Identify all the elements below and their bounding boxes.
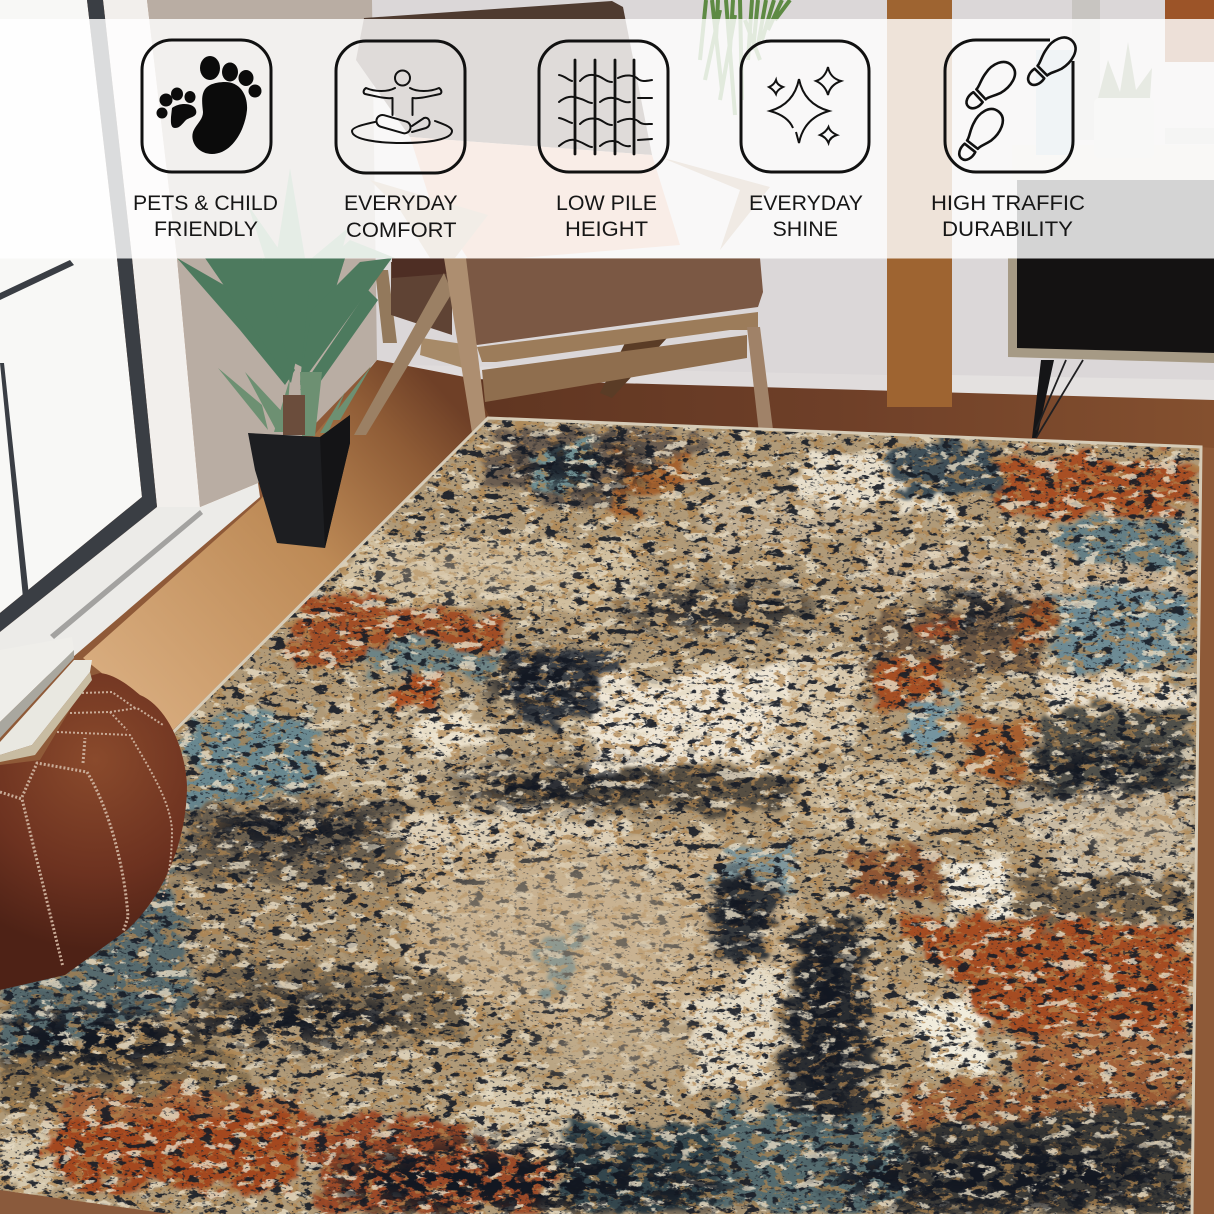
hanging plant (700, 0, 790, 115)
icon: low pile height (539, 41, 668, 172)
label: everyday shine: EVERYDAY (749, 192, 863, 215)
plant (177, 168, 395, 548)
label: everyday comfort: EVERYDAY (344, 192, 458, 215)
seat cushion side and front (391, 258, 452, 335)
leather pouf (0, 673, 187, 990)
label: high traffic durability: DURABILITY (942, 218, 1073, 241)
plant pot (248, 415, 350, 548)
label: pets and child friendly: FRIENDLY (154, 218, 258, 241)
back wall (370, 0, 1214, 395)
light wood floor (83, 360, 490, 730)
front legs (444, 258, 501, 545)
icon: high traffic durability (945, 32, 1081, 172)
icon: everyday comfort (336, 41, 465, 173)
label: everyday shine: SHINE (772, 218, 838, 241)
label: low pile height: LOW PILE (556, 192, 657, 215)
rug speckle layers (0, 410, 1214, 1214)
label: pets and child friendly: PETS & CHILD (133, 192, 278, 215)
chair (354, 1, 781, 545)
chair back cushion (356, 1, 652, 155)
pillow (410, 137, 680, 262)
dark wood floor (440, 378, 1214, 1214)
rug edge (0, 418, 1201, 1214)
label: pets and child friendly (133, 192, 278, 241)
chair arms (660, 157, 770, 250)
label: low pile height (556, 192, 657, 241)
plant leaves behind band (248, 168, 395, 258)
wooden post (887, 0, 952, 407)
back legs (375, 270, 397, 343)
label: everyday shine (749, 192, 863, 241)
window (0, 0, 260, 710)
window sill (0, 483, 260, 710)
media console (1008, 145, 1214, 438)
label: high traffic durability (931, 192, 1085, 241)
icon: pets and child friendly (142, 40, 271, 172)
label: high traffic durability: HIGH TRAFFIC (931, 192, 1085, 215)
rails (420, 338, 470, 370)
rug colour patches (0, 425, 1195, 1214)
label: everyday comfort (344, 192, 458, 242)
icon: everyday shine (741, 41, 869, 172)
baseboard (407, 365, 887, 392)
side wall (147, 0, 377, 507)
label: everyday comfort: COMFORT (346, 219, 457, 242)
rug (0, 420, 1200, 1214)
window reveal (103, 0, 200, 507)
label: low pile height: HEIGHT (565, 218, 648, 241)
diagonal strut (354, 273, 452, 435)
books (0, 637, 92, 762)
right wall decor (1036, 0, 1214, 158)
translucent feature band (0, 19, 1214, 258)
